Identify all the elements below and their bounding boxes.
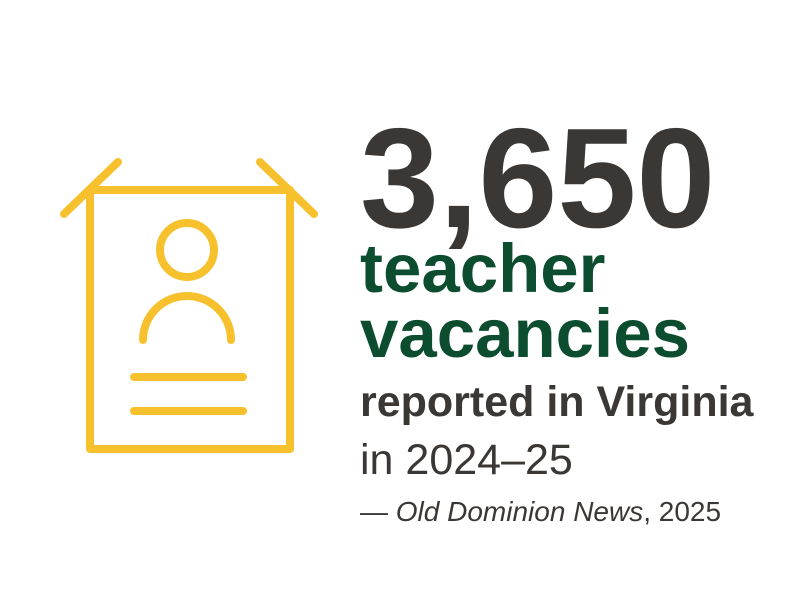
icon: document frame <box>64 162 314 449</box>
source citation: — Old Dominion News, 2025 <box>360 496 721 527</box>
text: reported in Virginia: reported in Virginia <box>360 378 753 426</box>
icon: text lines <box>134 377 243 411</box>
big number: 3,650 <box>360 99 715 258</box>
heading: teacher: teacher <box>360 230 605 307</box>
heading: vacancies: vacancies <box>360 295 690 372</box>
icon: person <box>143 223 231 340</box>
text: year: in 2024–25 <box>360 436 573 484</box>
